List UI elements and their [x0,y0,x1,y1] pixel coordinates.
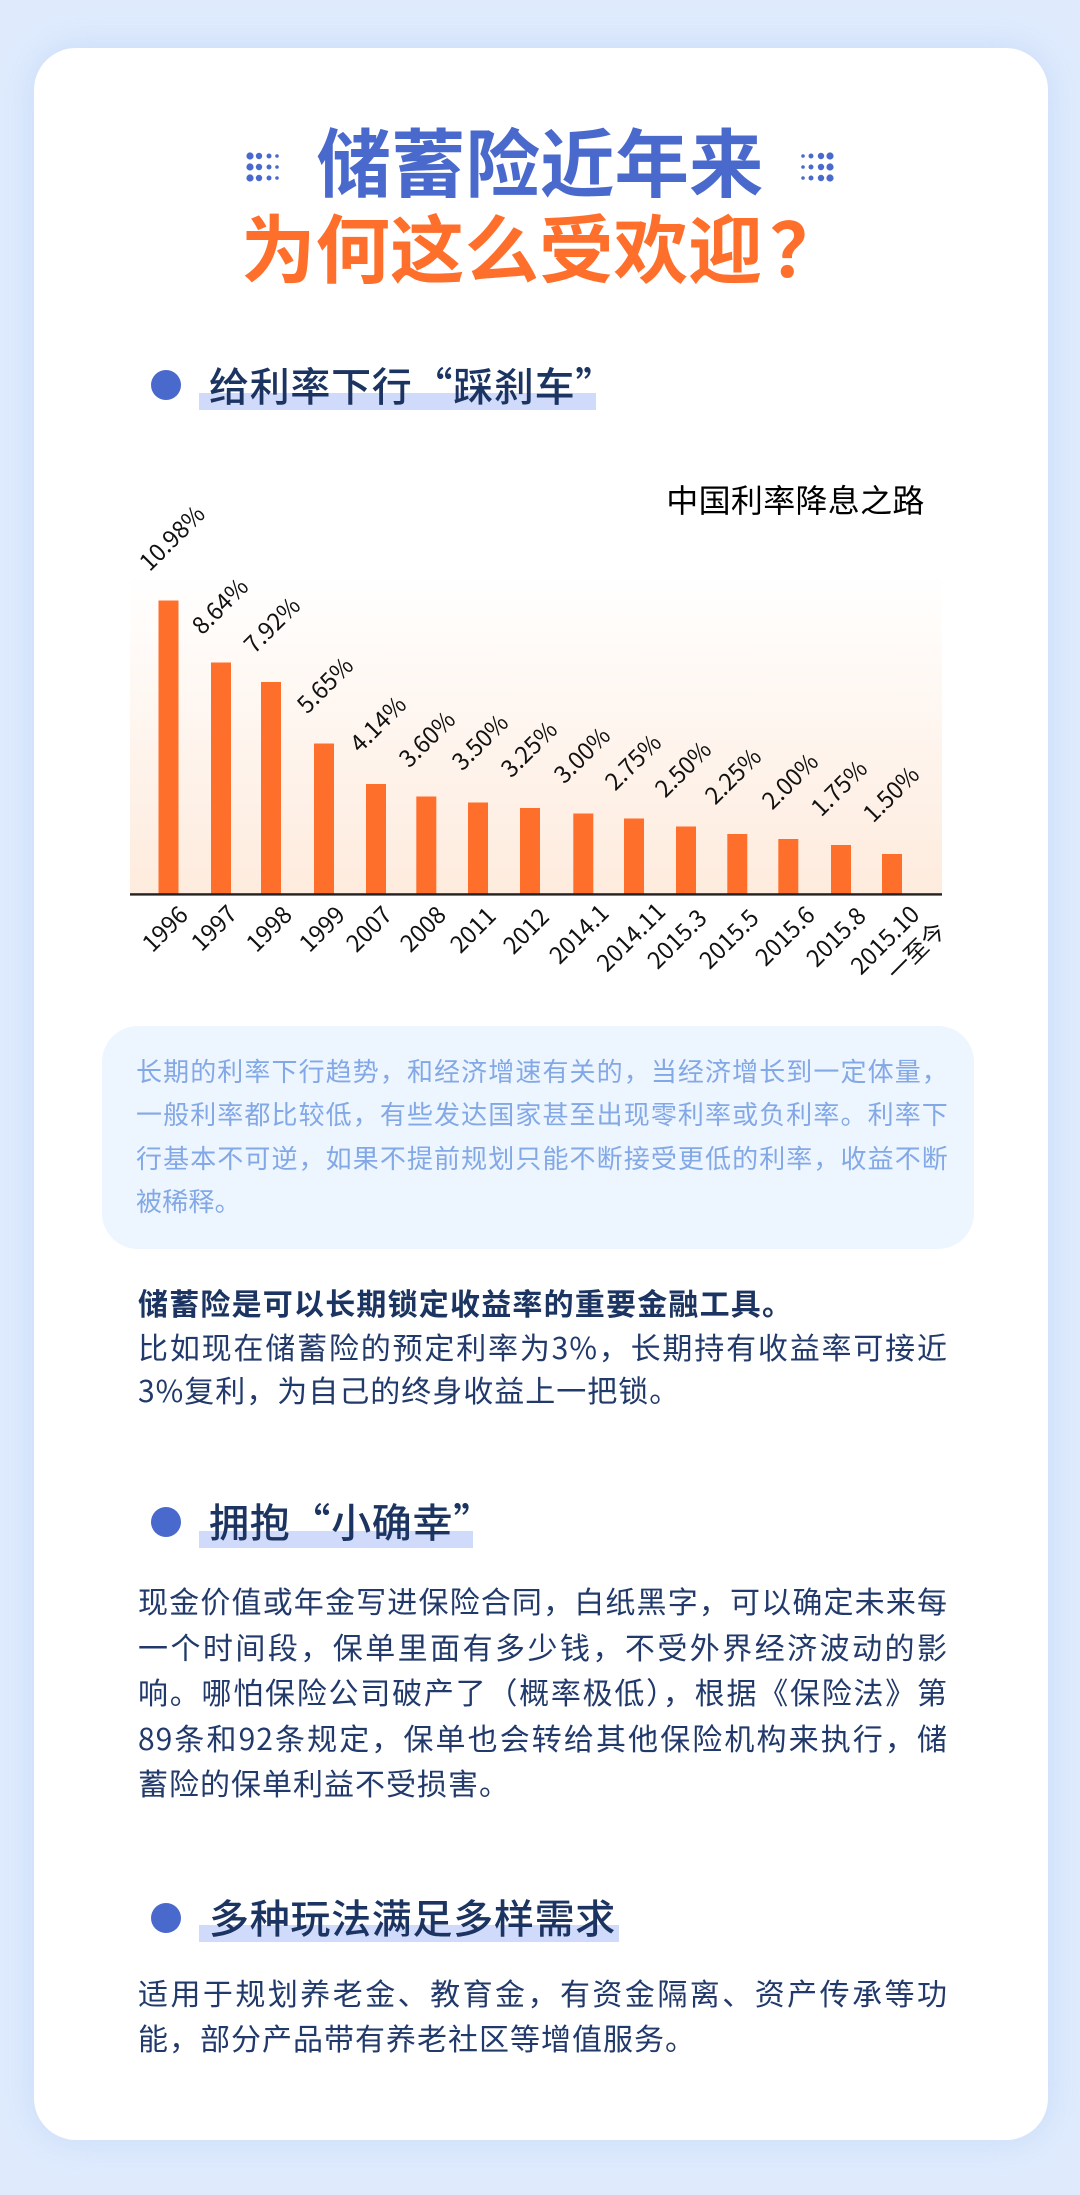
bar chart: China rate cuts: 3.50% [443,705,515,777]
section 2 body text: 蓄险的保单利益不受损害。 [138,1760,510,1804]
bar chart: China rate cuts: 2007 [337,897,398,958]
bar chart: China rate cuts: 2.50% [646,732,718,804]
section 2 body text: 响。哪怕保险公司破产了（概率极低），根据《保险法》第 [138,1669,948,1713]
section 2 body text [138,1578,948,1804]
icon: right dot grid [801,152,834,182]
section 3 heading: 多种玩法满足多样需求 [209,1887,616,1945]
callout panel [102,1026,974,1249]
callout text: 行基本不可逆，如果不提前规划只能不断接受更低的利率，收益不断 [136,1139,948,1176]
section 2 heading: 拥抱“小确幸” [209,1491,494,1549]
section 2 body text: 89条和92条规定，保单也会转给其他保险机构来执行，储 [138,1715,948,1759]
section 3 body text: 适用于规划养老金、教育金，有资金隔离、资产传承等功 [138,1970,948,2014]
bar chart: China rate cuts: 1998 [237,897,298,958]
title line 2: 为何这么受欢迎？ [241,192,844,299]
bar chart: China rate cuts: 2.25% [696,739,768,811]
bar chart: China rate cuts: 2014.11 [588,894,672,978]
callout text: 被稀释。 [136,1182,241,1219]
body text: savings insurance lock-in: 3%复利，为自己的终身收益上一把锁。 [138,1367,680,1411]
callout text: 长期的利率下行趋势，和经济增速有关的，当经济增长到一定体量， [136,1052,948,1089]
body text: savings insurance lock-in: 比如现在储蓄险的预定利率为3%，长期持有收益率可接近 [138,1324,948,1368]
title line 1: 储蓄险近年来 [316,106,764,213]
bar chart: China rate cuts: 8.64% [183,569,255,641]
bar chart: China rate cuts: 3.00% [545,718,617,790]
bar chart: China rate cuts: 1.50% [854,757,926,829]
bar chart: China rate cuts: 2.00% [753,744,825,816]
bar chart: China rate cuts: 3.60% [390,702,462,774]
body text: savings insurance lock-in [138,1280,948,1411]
section 1 heading: 给利率下行“踩刹车” [209,355,616,413]
bar chart: China rate cuts: 2015.3 [639,901,713,975]
bar chart: China rate cuts [130,476,952,987]
callout text [136,1052,948,1219]
bar chart: China rate cuts: 2008 [391,897,452,958]
callout text: 一般利率都比较低，有些发达国家甚至出现零利率或负利率。利率下 [136,1095,948,1132]
icon: left dot grid [246,152,279,182]
bar chart: China rate cuts: 10.98% [130,496,211,577]
section 2 body text: 现金价值或年金写进保险合同，白纸黑字，可以确定未来每 [138,1578,948,1622]
bar chart: China rate cuts: 2015.6 [747,898,821,972]
bar chart: China rate cuts: 1996 [133,897,194,958]
bar chart: China rate cuts: 2012 [494,899,555,960]
bar chart: China rate cuts: 1.75% [802,751,874,823]
bar chart: China rate cuts: 7.92% [235,588,307,660]
bar chart: China rate cuts: 1999 [290,897,351,958]
bar chart: China rate cuts: 3.25% [492,712,564,784]
bar chart: China rate cuts: 2.75% [596,725,668,797]
section 3 body text: 能，部分产品带有养老社区等增值服务。 [138,2015,696,2059]
chart title: 中国利率降息之路 [666,476,925,522]
bar chart: China rate cuts: 一至今 [878,913,952,987]
bar chart: China rate cuts: 4.14% [341,687,413,759]
bar chart: China rate cuts: 1997 [182,896,243,957]
bar chart: China rate cuts: 2011 [441,898,502,959]
bar chart: China rate cuts: 2014.1 [541,896,615,970]
section 2 body text: 一个时间段，保单里面有多少钱，不受外界经济波动的影 [138,1624,948,1668]
body text: savings insurance lock-in: 储蓄险是可以长期锁定收益率的重要金融工具。 [138,1280,793,1324]
section 3 body text [138,1970,948,2059]
bar chart: China rate cuts: 2015.10 [842,897,926,981]
bar chart: China rate cuts: 2015.8 [798,899,872,973]
bar chart: China rate cuts: 5.65% [288,648,360,720]
bar chart: China rate cuts: 2015.5 [691,901,765,975]
